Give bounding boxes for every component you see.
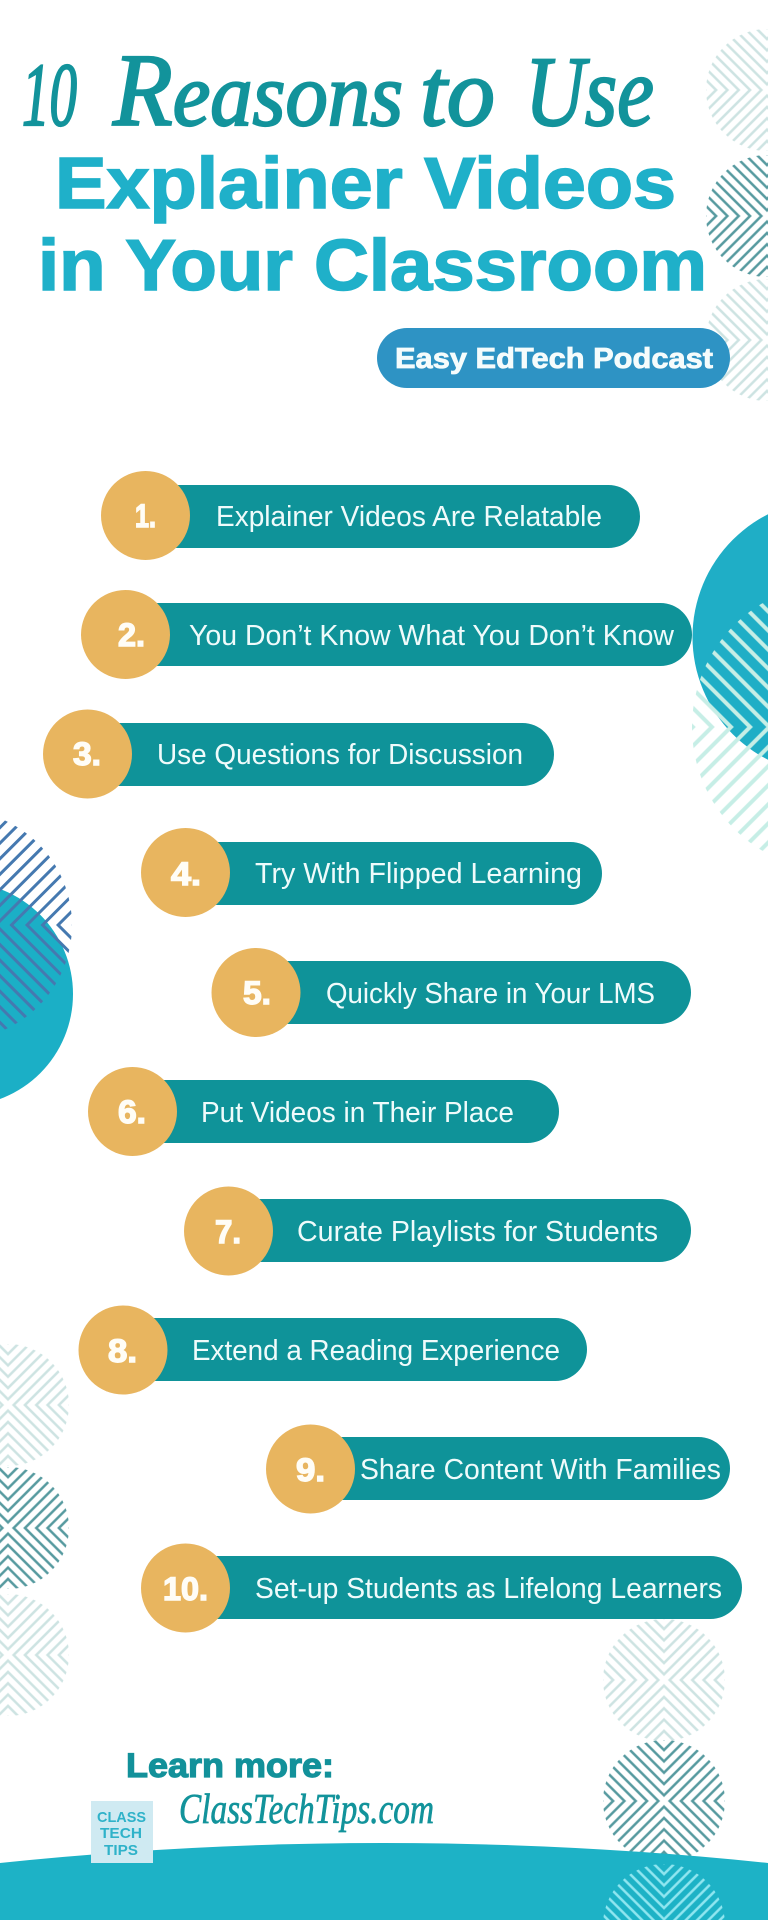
logo: Class Tech Tips: CLASS <box>97 1809 146 1826</box>
reason 6 <box>88 1067 559 1156</box>
reason 10: Set-up Students as Lifelong Learners <box>255 1573 722 1605</box>
logo: Class Tech Tips <box>91 1801 153 1863</box>
reason 3: 3. <box>73 736 101 772</box>
title script line: Use <box>525 36 654 147</box>
logo: Class Tech Tips: TECH <box>100 1825 142 1842</box>
top-right patterned circles <box>706 29 768 401</box>
reason 7 <box>184 1186 691 1276</box>
reason 8: 8. <box>108 1333 137 1369</box>
reason 8 <box>78 1306 587 1394</box>
reason 4: 4. <box>171 856 201 892</box>
learn more label: Learn more: <box>126 1747 334 1785</box>
reason 2 <box>81 590 692 679</box>
reason 4 <box>141 828 602 917</box>
reason 1: Explainer Videos Are Relatable <box>216 501 602 533</box>
reason 8: Extend a Reading Experience <box>192 1335 560 1367</box>
patterned circle on wave <box>603 1864 725 1920</box>
title script line: 10 <box>22 46 77 145</box>
reason 9: Share Content With Families <box>360 1454 721 1486</box>
reason 1 <box>101 471 640 560</box>
reason 2: 2. <box>118 617 145 653</box>
reason 1: 1. <box>135 498 156 534</box>
website script text: ClassTechTips.com <box>179 1787 434 1833</box>
left-side patterned circles <box>0 1344 69 1716</box>
reason 10: 10. <box>163 1571 208 1607</box>
reason 6: Put Videos in Their Place <box>201 1097 514 1129</box>
reason 7: Curate Playlists for Students <box>297 1216 658 1248</box>
reason 9: 9. <box>296 1452 325 1488</box>
title script line: Reasons <box>112 33 403 148</box>
title line two: Explainer Videos <box>55 144 676 224</box>
title script line: to <box>420 39 495 146</box>
reason 7: 7. <box>215 1214 241 1250</box>
reason 10 <box>141 1544 742 1632</box>
reason 9 <box>266 1424 730 1514</box>
left teal circle with chevron overlay <box>0 810 73 1106</box>
reason 3 <box>43 710 554 798</box>
reason 6: 6. <box>118 1094 146 1130</box>
podcast badge: Easy EdTech Podcast <box>395 343 713 375</box>
title line three: in Your Classroom <box>38 226 707 306</box>
podcast badge <box>377 328 730 388</box>
bottom-right patterned circles <box>603 1619 725 1862</box>
reason 5 <box>212 948 691 1037</box>
reason 3: Use Questions for Discussion <box>157 739 523 771</box>
logo: Class Tech Tips: TIPS <box>104 1842 138 1859</box>
right teal circle with chevron overlay <box>692 500 768 871</box>
bottom teal wave <box>0 1843 768 1920</box>
reason 2: You Don’t Know What You Don’t Know <box>189 620 675 652</box>
reason 5: Quickly Share in Your LMS <box>326 978 655 1010</box>
reason 5: 5. <box>243 975 271 1011</box>
title script line <box>22 33 654 148</box>
reason 4: Try With Flipped Learning <box>255 858 582 890</box>
